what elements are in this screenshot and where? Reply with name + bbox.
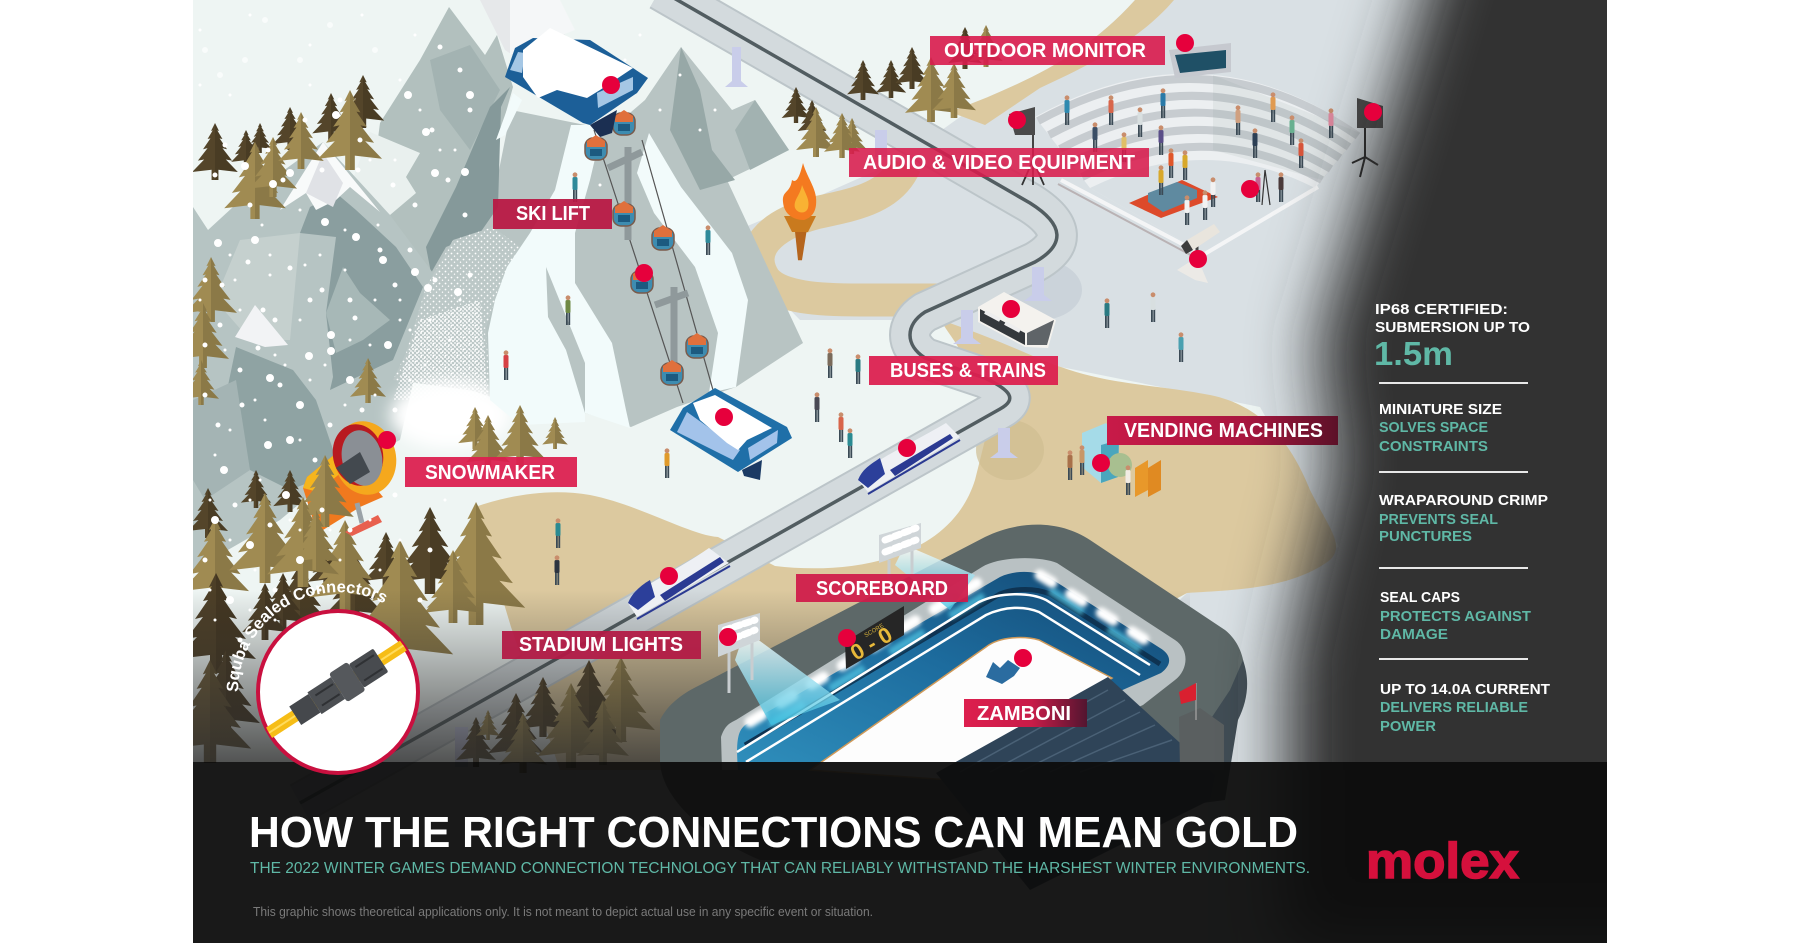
amphitheater seating xyxy=(1035,74,1360,260)
callout: squba sealed connector xyxy=(226,583,420,775)
stadium light towers xyxy=(718,523,921,693)
disclaimer: This graphic shows theoretical applications only. It is not meant to depict actual use in any specific event or situation. xyxy=(253,904,873,919)
feature: current rating: UP TO 14.0A CURRENT xyxy=(1380,681,1550,698)
label: audio and video equipment xyxy=(849,148,1149,177)
falling snow xyxy=(200,15,715,640)
golden pine trees xyxy=(177,25,1003,773)
label: scoreboard xyxy=(796,574,968,602)
feature: seal caps xyxy=(1380,589,1531,643)
feature: seal caps: DAMAGE xyxy=(1380,626,1448,643)
label: zamboni: ZAMBONI xyxy=(977,703,1071,725)
lower train xyxy=(628,548,730,619)
label: outdoor monitor xyxy=(930,36,1165,65)
stadium seating xyxy=(737,572,1169,770)
snowboarders and skiers xyxy=(504,172,710,478)
scoreboard xyxy=(845,606,904,669)
label: ski lift xyxy=(493,199,612,229)
spectators and athletes xyxy=(1064,88,1334,225)
dark foreground pines xyxy=(193,573,300,763)
label: scoreboard: SCOREBOARD xyxy=(816,578,948,600)
callout: squba sealed connector: Squba Sealed Connectors xyxy=(226,583,386,692)
rink lights xyxy=(750,575,1150,722)
ski runs xyxy=(488,93,748,428)
elevated road and rail line xyxy=(300,0,1082,803)
feature: submersion xyxy=(1374,319,1530,372)
pedestrians on the plaza xyxy=(554,292,1184,585)
title: HOW THE RIGHT CONNECTIONS CAN MEAN GOLD xyxy=(249,808,1298,857)
label: ski lift: SKI LIFT xyxy=(516,203,590,225)
label: buses and trains xyxy=(869,356,1058,385)
feature: seal caps: PROTECTS AGAINST xyxy=(1380,608,1531,625)
medal podium xyxy=(1129,180,1218,218)
grandstand roof xyxy=(936,677,1215,890)
label: outdoor monitor: OUTDOOR MONITOR xyxy=(944,40,1147,62)
gondola lift towers and cables xyxy=(594,130,713,403)
gondola cabins xyxy=(585,110,708,385)
upper train xyxy=(858,423,960,494)
stadium rim xyxy=(721,558,1186,770)
torch xyxy=(783,163,816,260)
feature: wraparound crimp: PUNCTURES xyxy=(1379,528,1472,545)
snowmaker machine xyxy=(303,421,396,536)
road supports xyxy=(455,47,1052,767)
plaza ground xyxy=(748,0,1428,762)
icon: connector with yellow wires xyxy=(255,624,424,750)
feature: wraparound crimp: WRAPAROUND CRIMP xyxy=(1379,492,1548,509)
label: zamboni xyxy=(964,699,1087,727)
bus xyxy=(978,292,1056,348)
pines in front of snowmaker xyxy=(267,455,354,587)
panel: illustrated winter games scene xyxy=(193,0,1607,920)
scoreboard: 0 - 0 xyxy=(846,622,897,665)
curved caption xyxy=(238,592,385,692)
label: buses and trains: BUSES & TRAINS xyxy=(890,360,1046,382)
feature: wraparound crimp xyxy=(1379,492,1548,545)
pine trees xyxy=(188,27,982,767)
feature: current rating xyxy=(1380,681,1550,735)
outdoor monitor xyxy=(1169,43,1231,78)
feature: seal caps: SEAL CAPS xyxy=(1380,589,1460,606)
label: vending machines xyxy=(1107,416,1338,445)
stadium light beams xyxy=(735,545,975,725)
mountains xyxy=(193,0,803,570)
label: audio and video equipment: AUDIO & VIDEO EQUIPMENT xyxy=(863,152,1135,174)
label: stadium lights: STADIUM LIGHTS xyxy=(519,634,683,656)
ski lift top station xyxy=(505,28,648,137)
zamboni xyxy=(986,660,1020,684)
footer band xyxy=(193,762,1607,943)
panel: feature list: IP68 CERTIFIED: xyxy=(1375,301,1508,318)
feature: miniature size: CONSTRAINTS xyxy=(1379,438,1488,455)
label: stadium lights xyxy=(502,631,701,659)
logo: molex: molex xyxy=(1366,833,1519,889)
speakers on stands xyxy=(1009,98,1383,185)
feature: current rating: DELIVERS RELIABLE xyxy=(1380,699,1528,716)
ski lift bottom station xyxy=(670,388,792,480)
rink ice xyxy=(810,638,1112,780)
ice stadium xyxy=(660,525,1247,890)
panel: feature list xyxy=(1374,301,1550,735)
label: snowmaker xyxy=(405,457,577,487)
spray from snowmaker over the slope xyxy=(390,227,520,449)
feature: current rating: POWER xyxy=(1380,718,1436,735)
tv camera on base xyxy=(1177,224,1220,283)
vending machines xyxy=(1068,423,1161,497)
feature: miniature size xyxy=(1379,401,1502,455)
right features panel shading xyxy=(1285,0,1800,943)
feature: miniature size: MINIATURE SIZE xyxy=(1379,401,1502,418)
label: vending machines: VENDING MACHINES xyxy=(1124,420,1323,442)
subtitle: THE 2022 WINTER GAMES DEMAND CONNECTION TECHNOLOGY THAT CAN RELIABLY WITHSTAND THE HARSHEST WINTER ENVIRONMENTS. xyxy=(250,860,1310,877)
label: snowmaker: SNOWMAKER xyxy=(425,462,556,484)
bottom scene fade xyxy=(193,590,1190,762)
tan pathways xyxy=(475,0,1336,770)
feature: submersion: 1.5m xyxy=(1374,335,1453,372)
feature: wraparound crimp: PREVENTS SEAL xyxy=(1379,511,1498,528)
feature: submersion: SUBMERSION UP TO xyxy=(1375,319,1530,336)
scoreboard: SCORE xyxy=(864,623,885,639)
red location markers xyxy=(378,34,1382,667)
feature: miniature size: SOLVES SPACE xyxy=(1379,419,1488,436)
tower and flag xyxy=(1179,708,1224,762)
